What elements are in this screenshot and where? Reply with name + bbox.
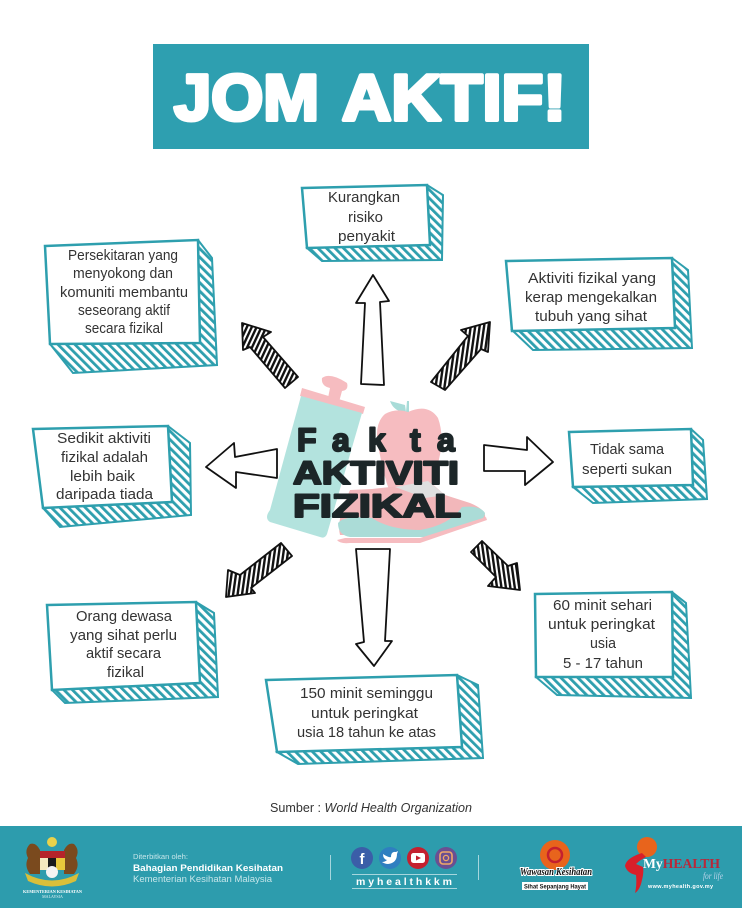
panel: Persekitaran yang menyokong: secara fizikal xyxy=(85,320,163,337)
panel: 150 minit seminggu: usia 18 tahun ke atas xyxy=(297,724,436,741)
panel: Aktiviti fizikal yang kerap: kerap mengekalkan xyxy=(525,289,657,306)
logo: MyHEALTH: MyHEALTH xyxy=(643,857,720,872)
arrow: hatched up-right xyxy=(431,322,490,390)
arrow: left xyxy=(206,443,277,488)
footer band xyxy=(0,826,742,908)
panel: Aktiviti fizikal yang kerap xyxy=(506,258,692,350)
icon: apple xyxy=(377,401,442,505)
arrow: hatched down-left xyxy=(226,543,292,597)
panel: Persekitaran yang menyokong xyxy=(45,240,217,373)
panel: Kurangkan risiko penyakit: risiko xyxy=(348,209,383,226)
logo: Wawasan Kesihatan xyxy=(520,840,592,890)
panel: Tidak sama seperti sukan: seperti sukan xyxy=(582,461,672,478)
icon: coat of arms: MALAYSIA xyxy=(42,894,63,899)
panel: 60 minit sehari: untuk peringkat xyxy=(548,616,656,633)
panel: Orang dewasa: yang sihat perlu xyxy=(70,627,177,644)
panel: Orang dewasa: Orang dewasa xyxy=(76,608,173,625)
panel: Persekitaran yang menyokong: seseorang aktif xyxy=(78,302,171,319)
panel: 60 minit sehari xyxy=(535,592,691,698)
panel: Persekitaran yang menyokong: menyokong dan xyxy=(73,265,173,282)
social media icons: myhealthkkm xyxy=(356,876,452,888)
central illustration: bottle, apple, shoe xyxy=(267,376,487,543)
publisher text: Bahagian Pendidikan Kesihatan xyxy=(133,863,283,874)
central heading: FIZIKAL xyxy=(293,488,461,524)
icon: running shoe xyxy=(337,481,487,543)
publisher text: Kementerian Kesihatan Malaysia xyxy=(133,874,272,884)
arrow: hatched down-right xyxy=(471,541,520,590)
title banner: JOM xyxy=(174,61,319,134)
arrow: up xyxy=(356,275,389,385)
panel: Persekitaran yang menyokong: komuniti membantu xyxy=(60,284,188,301)
panel: Sedikit aktiviti: fizikal adalah xyxy=(61,449,148,466)
panel: Kurangkan risiko penyakit: Kurangkan xyxy=(328,189,400,206)
panel: Orang dewasa xyxy=(47,602,218,703)
panel: Sedikit aktiviti xyxy=(33,426,191,527)
panel: 150 minit seminggu: 150 minit seminggu xyxy=(300,685,433,702)
logo: MyHEALTH: for life xyxy=(703,871,723,881)
logo: MyHEALTH xyxy=(625,837,723,893)
publisher text: Diterbitkan oleh: xyxy=(133,852,188,861)
central heading: Fakta xyxy=(297,422,455,458)
icon: coat of arms: KEMENTERIAN KESIHATAN xyxy=(23,889,83,894)
panel: Sedikit aktiviti: daripada tiada xyxy=(56,486,154,503)
panel: Sedikit aktiviti: Sedikit aktiviti xyxy=(57,430,151,447)
panel: Orang dewasa: fizikal xyxy=(107,664,144,681)
arrow: right xyxy=(484,437,553,485)
panel: Kurangkan risiko penyakit xyxy=(302,185,443,261)
logo: Wawasan Kesihatan: Wawasan Kesihatan xyxy=(520,867,592,878)
publisher text xyxy=(133,852,283,884)
panel: Tidak sama seperti sukan: Tidak sama xyxy=(590,441,665,458)
panel: Tidak sama seperti sukan xyxy=(569,429,707,503)
social media icons: f xyxy=(360,851,366,868)
logo: MyHEALTH: www.myhealth.gov.my xyxy=(647,884,714,890)
panel: Persekitaran yang menyokong: Persekitaran yang xyxy=(68,247,178,264)
title banner xyxy=(153,44,589,149)
panel: Aktiviti fizikal yang kerap: tubuh yang sihat xyxy=(535,308,648,325)
panel: 60 minit sehari: 5 - 17 tahun xyxy=(563,655,643,672)
panel: 60 minit sehari: usia xyxy=(590,635,617,652)
panel: Aktiviti fizikal yang kerap: Aktiviti fizikal yang xyxy=(528,270,656,287)
panel: 150 minit seminggu xyxy=(266,675,483,764)
icon: coat of arms xyxy=(23,837,83,899)
arrow: hatched up-left xyxy=(242,323,298,388)
central heading: AKTIVITI xyxy=(293,455,459,491)
logo: Wawasan Kesihatan: Sihat Sepanjang Hayat xyxy=(524,884,587,890)
arrow: down xyxy=(356,549,392,666)
title banner: AKTIF! xyxy=(342,61,566,134)
panel: 150 minit seminggu: untuk peringkat xyxy=(311,705,419,722)
source line: Sumber : World Health Organization xyxy=(270,801,472,815)
central heading xyxy=(293,422,461,524)
panel: Orang dewasa: aktif secara xyxy=(86,645,162,662)
icon: water bottle xyxy=(267,376,365,538)
panel: Kurangkan risiko penyakit: penyakit xyxy=(338,228,396,245)
panel: 60 minit sehari: 60 minit sehari xyxy=(553,597,652,614)
social media icons xyxy=(330,847,479,889)
panel: Sedikit aktiviti: lebih baik xyxy=(70,468,135,485)
